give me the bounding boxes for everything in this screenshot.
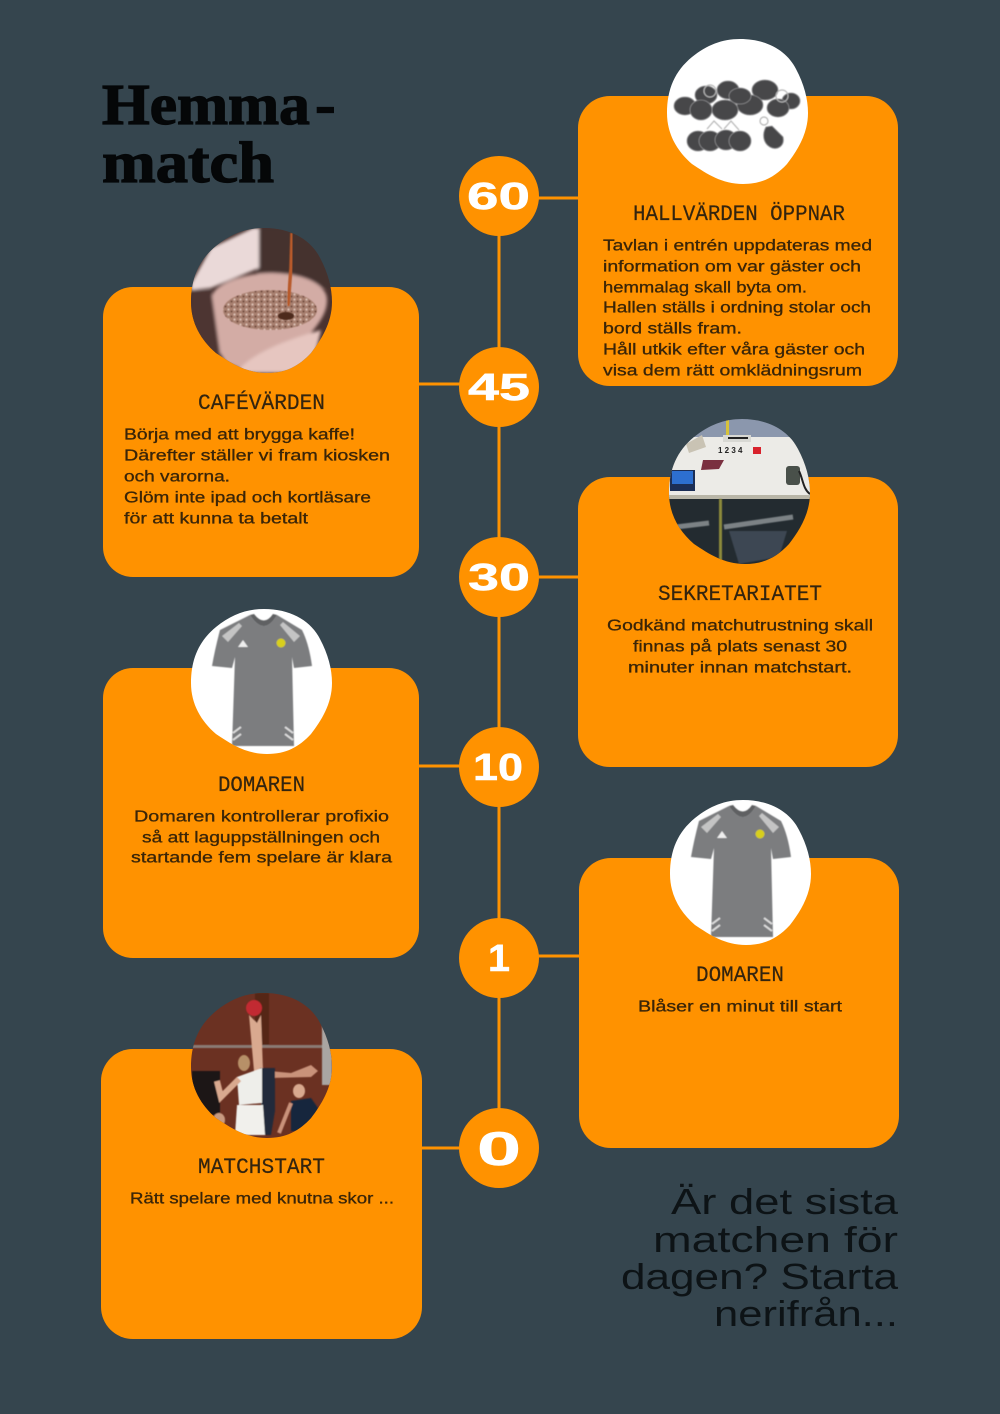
title <box>102 73 336 195</box>
marker: 60 <box>459 156 539 236</box>
text block: och varorna. <box>124 469 230 486</box>
marker: 30 <box>459 537 539 617</box>
text block: hemmalag skall byta om. <box>603 280 807 297</box>
heading: DOMAREN <box>696 963 784 988</box>
text block: Godkänd matchutrustning skall <box>607 618 873 635</box>
panel: hallvärden öppnar <box>578 39 898 386</box>
heading: CAFÉVÄRDEN <box>198 390 325 416</box>
text block: Därefter ställer vi fram kiosken <box>124 448 390 465</box>
text block: bord ställs fram. <box>603 321 742 338</box>
text block: finnas på plats senast 30 <box>633 639 847 656</box>
text block: information om var gäster och <box>603 259 861 276</box>
title: Hemma- <box>102 73 336 137</box>
text block <box>607 618 873 677</box>
text block: Blåser en minut till start <box>638 999 843 1016</box>
heading: SEKRETARIATET <box>658 582 822 607</box>
title: match <box>102 130 274 195</box>
marker: 60: 60 <box>467 176 530 218</box>
closing note: nerifrån... <box>714 1293 898 1334</box>
text block: minuter innan matchstart. <box>628 660 852 677</box>
text block: startande fem spelare är klara <box>131 850 392 867</box>
text block <box>603 238 872 380</box>
panel: cafévärden <box>103 228 419 577</box>
closing note: dagen? Starta <box>621 1256 899 1297</box>
timeline line and connectors <box>417 196 580 1150</box>
marker: 10 <box>459 727 539 807</box>
icon: key fobs photo <box>667 39 808 184</box>
text block: Börja med att brygga kaffe! <box>124 427 355 444</box>
text block: för att kunna ta betalt <box>124 511 309 528</box>
icon: basketball photo <box>191 993 332 1138</box>
text block: så att laguppställningen och <box>142 830 380 847</box>
text block: Tavlan i entrén uppdateras med <box>603 238 872 255</box>
text block: Rätt spelare med knutna skor ... <box>130 1191 394 1208</box>
text block: visa dem rätt omklädningsrum <box>603 363 862 380</box>
text block <box>131 809 392 867</box>
panel: domaren (10) <box>103 609 419 958</box>
marker: 45 <box>459 347 539 427</box>
marker: 0 <box>459 1108 539 1188</box>
text block <box>124 427 390 528</box>
marker: 0: 0 <box>477 1122 521 1175</box>
closing note: Är det sista <box>671 1181 899 1222</box>
marker: 10: 10 <box>473 747 523 789</box>
icon: coffee photo <box>191 228 332 373</box>
closing note <box>621 1181 899 1334</box>
heading: HALLVÄRDEN ÖPPNAR <box>633 202 845 227</box>
text block: Domaren kontrollerar profixio <box>134 809 389 826</box>
panel: sekretariatet <box>578 419 898 767</box>
panel: matchstart <box>101 993 422 1339</box>
heading: DOMAREN <box>218 773 305 798</box>
marker: 45: 45 <box>468 367 530 409</box>
icon: secretariat table photo: 1 2 3 4 <box>718 446 743 455</box>
marker: 1 <box>459 918 539 998</box>
panel: domaren (1) <box>579 800 899 1148</box>
marker: 1: 1 <box>488 938 510 980</box>
marker: 30: 30 <box>468 557 530 599</box>
icon: referee shirt <box>191 609 332 754</box>
heading: MATCHSTART <box>198 1155 325 1180</box>
text block: Hallen ställs i ordning stolar och <box>603 300 871 317</box>
text block: Glöm inte ipad och kortläsare <box>124 490 371 507</box>
icon: secretariat table photo <box>669 419 810 564</box>
icon: referee shirt <box>670 800 811 945</box>
closing note: matchen för <box>653 1219 898 1260</box>
text block: Håll utkik efter våra gäster och <box>603 342 865 359</box>
